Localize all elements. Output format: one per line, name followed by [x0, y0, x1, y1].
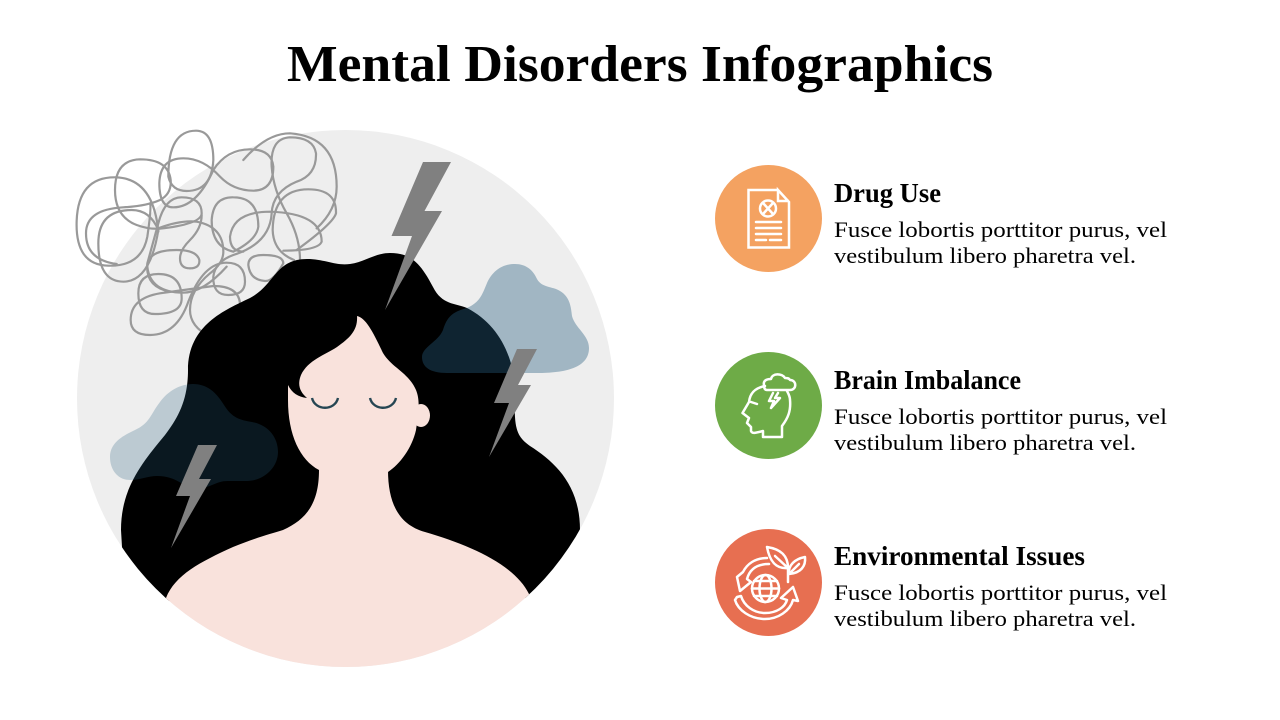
lightning bolt right: [489, 349, 537, 457]
description: Fusce lobortis porttitor purus, vel: [834, 217, 1167, 242]
description: [834, 217, 1167, 268]
scribble of tangled thoughts: [77, 131, 337, 337]
description: vestibulum libero pharetra vel.: [834, 606, 1136, 631]
body: [166, 471, 529, 667]
description: [834, 580, 1167, 631]
description: vestibulum libero pharetra vel.: [834, 243, 1136, 268]
description: vestibulum libero pharetra vel.: [834, 430, 1136, 455]
ear: [412, 404, 430, 427]
item: Environmental Issues: [715, 529, 1167, 636]
icon: document with prohibited symbol: [715, 165, 822, 272]
face: [288, 316, 419, 480]
heading: Brain Imbalance: [834, 365, 1021, 395]
eyes: [312, 398, 396, 408]
heading: Environmental Issues: [834, 541, 1085, 571]
lightning bolt left: [171, 445, 217, 548]
item: Drug Use: [715, 165, 1167, 272]
cloud left: [110, 384, 278, 488]
icon: head with storm cloud: [715, 352, 822, 459]
illustration: woman with troubled thoughts: [77, 130, 614, 680]
cloud right: [422, 264, 589, 373]
description: [834, 404, 1167, 455]
item: Brain Imbalance: [715, 352, 1167, 459]
icon: globe with recycling arrows and leaves: [715, 529, 822, 636]
description: Fusce lobortis porttitor purus, vel: [834, 580, 1167, 605]
title: Mental Disorders Infographics: [287, 36, 993, 93]
background circle: [77, 130, 614, 667]
heading: Drug Use: [834, 178, 941, 208]
lightning bolt large: [385, 162, 451, 310]
description: Fusce lobortis porttitor purus, vel: [834, 404, 1167, 429]
hair: [121, 253, 600, 610]
